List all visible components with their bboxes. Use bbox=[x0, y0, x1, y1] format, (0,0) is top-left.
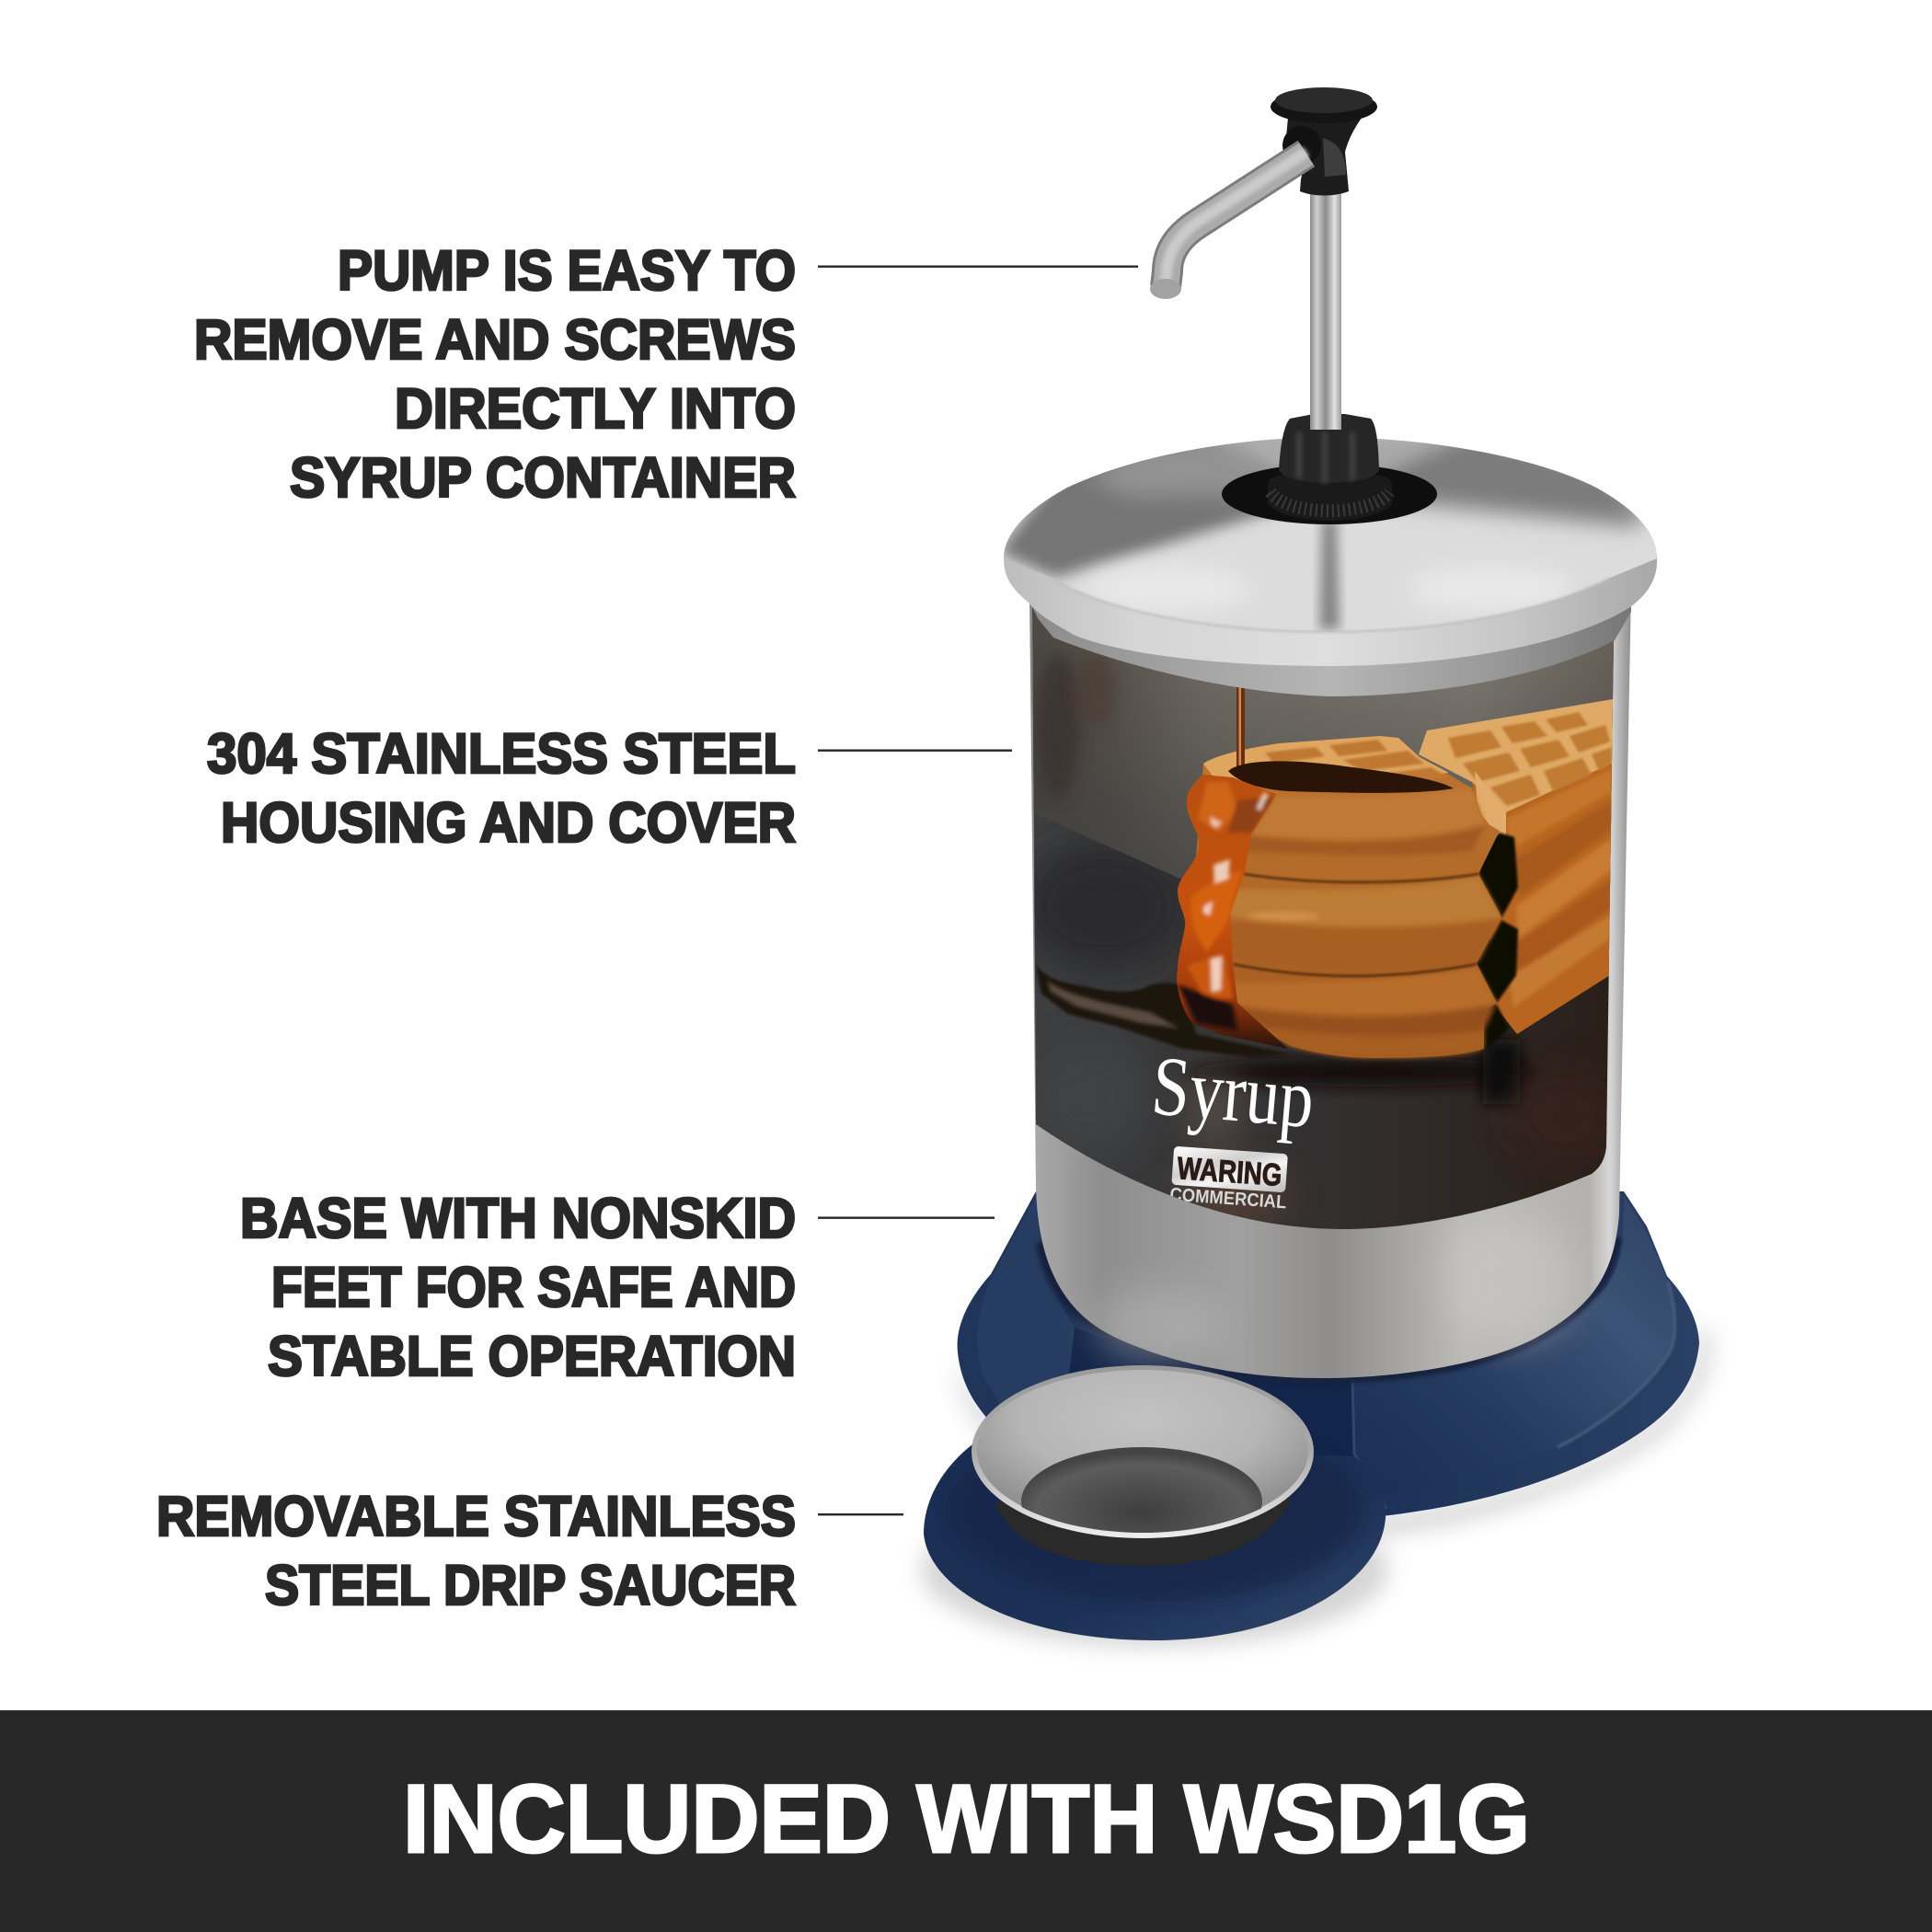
front waffle stack bbox=[1187, 736, 1501, 1058]
table shading bbox=[1021, 842, 1619, 1228]
lid with rim and dome bbox=[998, 428, 1665, 666]
callout: pump: SYRUP CONTAINER bbox=[290, 446, 796, 509]
callout: pump bbox=[194, 239, 1138, 509]
shadow under base bbox=[921, 1325, 1711, 1647]
puddle bbox=[1036, 964, 1290, 1057]
right waffle stack bbox=[1419, 699, 1613, 1034]
callout: pump: REMOVE AND SCREWS bbox=[194, 308, 796, 371]
footer title: INCLUDED WITH WSD1G bbox=[403, 1765, 1530, 1873]
logo: Waring Commercial: WARING bbox=[1176, 1151, 1283, 1193]
callout: saucer: REMOVABLE STAINLESS bbox=[156, 1485, 796, 1547]
logo: Waring Commercial bbox=[1169, 1146, 1290, 1213]
callout: housing bbox=[207, 722, 1012, 854]
navy base bbox=[958, 1191, 1699, 1518]
callout: saucer: STEEL DRIP SAUCER bbox=[265, 1554, 796, 1616]
callout: pump: PUMP IS EASY TO bbox=[338, 239, 796, 302]
callout: base: STABLE OPERATION bbox=[268, 1325, 796, 1387]
saucer tray bbox=[924, 1417, 1386, 1640]
waffle label artwork bbox=[1021, 589, 1619, 1233]
blurred backdrop bbox=[1032, 589, 1615, 883]
pump head bbox=[1271, 87, 1377, 195]
callout: housing: 304 STAINLESS STEEL bbox=[207, 722, 796, 785]
callout: base bbox=[240, 1187, 995, 1387]
logo: Waring Commercial: COMMERCIAL bbox=[1169, 1185, 1287, 1213]
lid lower band bbox=[1030, 589, 1631, 696]
callout: saucer bbox=[156, 1485, 903, 1616]
label text: Syrup: Syrup bbox=[1148, 1038, 1317, 1145]
pump collar and black opening bbox=[1222, 414, 1437, 524]
dark gaps between stacks bbox=[1477, 833, 1518, 1053]
pump stem bbox=[1310, 189, 1341, 430]
product: syrup dispenser bbox=[921, 87, 1711, 1647]
footer banner bbox=[0, 1710, 1932, 1932]
stainless housing bbox=[1029, 589, 1631, 1378]
callout: pump: DIRECTLY INTO bbox=[395, 377, 796, 440]
callout: housing: HOUSING AND COVER bbox=[221, 791, 796, 854]
callout: base: FEET FOR SAFE AND bbox=[271, 1256, 796, 1318]
drip saucer bbox=[972, 1365, 1314, 1566]
pump spout bbox=[1150, 152, 1306, 299]
callout: base: BASE WITH NONSKID bbox=[240, 1187, 796, 1249]
syrup stream and curtain bbox=[1177, 676, 1454, 1049]
